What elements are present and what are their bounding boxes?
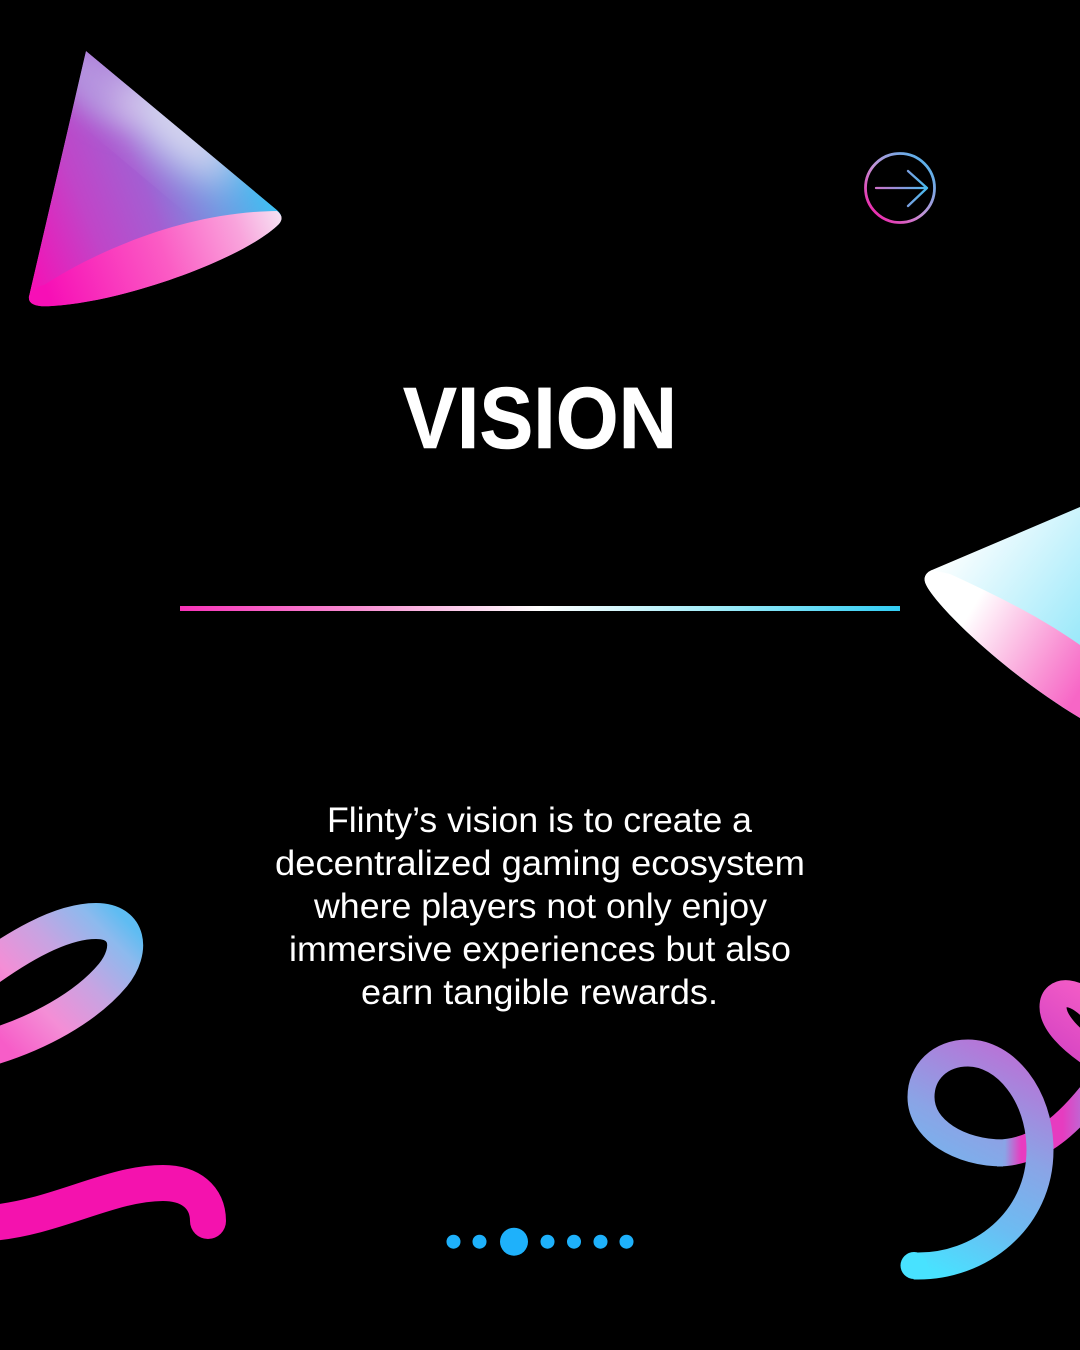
- decorative ribbon loop, left edge: [0, 921, 125, 1052]
- icon: circled arrow: [866, 154, 934, 222]
- title: VISION: [403, 370, 677, 467]
- gradient divider: [180, 606, 900, 611]
- body paragraph: decentralized gaming ecosystem: [275, 844, 805, 883]
- pagination dots: [446, 1228, 634, 1256]
- body paragraph: earn tangible rewards.: [361, 973, 718, 1012]
- body paragraph: [275, 801, 805, 1012]
- body paragraph: immersive experiences but also: [289, 930, 791, 969]
- icon: white and pink cone, right edge: [925, 507, 1080, 718]
- decorative magenta ribbon, bottom left: [0, 1183, 208, 1223]
- decorative spiral ribbon, bottom right: [900, 994, 1080, 1279]
- body paragraph: where players not only enjoy: [313, 887, 768, 926]
- icon: purple and pink cone, top left: [29, 27, 282, 306]
- body paragraph: Flinty’s vision is to create a: [327, 801, 753, 840]
